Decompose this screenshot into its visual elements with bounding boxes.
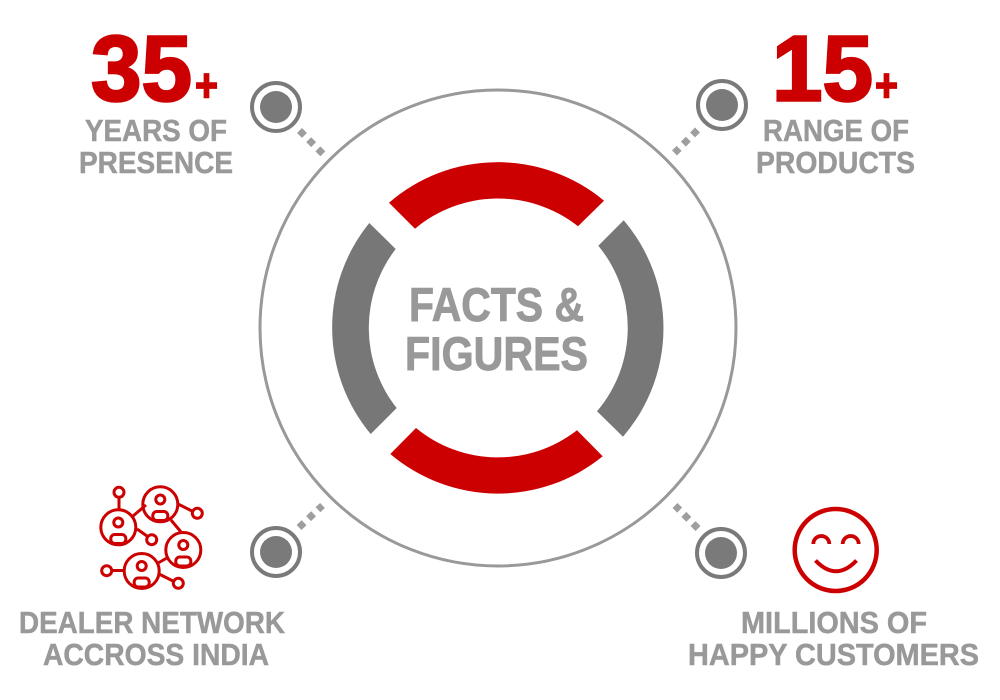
- icon: dealer network: [101, 487, 202, 588]
- stat: 15+ products: [756, 16, 915, 180]
- stat: 35+ years: PRESENCE: [79, 145, 233, 180]
- stat: 35+ years: 35: [91, 16, 192, 120]
- bottom red arc: [390, 428, 603, 494]
- central diagram: [260, 90, 736, 566]
- label: dealer network: ACCROSS INDIA: [43, 637, 269, 672]
- marker: bottom right: [675, 506, 745, 577]
- label: dealer network: DEALER NETWORK: [19, 605, 286, 640]
- marker: bottom left: [252, 506, 322, 576]
- stat: 15+ products: 15: [772, 16, 873, 120]
- center title: [405, 278, 588, 380]
- stat: 35+ years: YEARS OF: [85, 113, 227, 148]
- stat: 15+ products: +: [875, 59, 898, 111]
- stat: 15+ products: PRODUCTS: [756, 145, 915, 180]
- label: dealer network: [19, 605, 286, 672]
- right grey arc: [597, 220, 663, 437]
- marker: top left: [252, 83, 323, 154]
- marker: top right: [674, 81, 746, 153]
- stat: 35+ years: [79, 16, 233, 180]
- center title: FIGURES: [405, 327, 588, 380]
- center title: FACTS &: [409, 278, 584, 331]
- outer circle: [260, 90, 736, 566]
- stat: 15+ products: RANGE OF: [763, 113, 909, 148]
- label: happy customers: [688, 605, 979, 672]
- label: happy customers: HAPPY CUSTOMERS: [688, 637, 979, 672]
- stat: 35+ years: +: [195, 59, 218, 111]
- icon: smiley face: [795, 509, 877, 591]
- left grey arc: [332, 223, 397, 434]
- top red arc: [389, 162, 604, 229]
- label: happy customers: MILLIONS OF: [741, 605, 927, 640]
